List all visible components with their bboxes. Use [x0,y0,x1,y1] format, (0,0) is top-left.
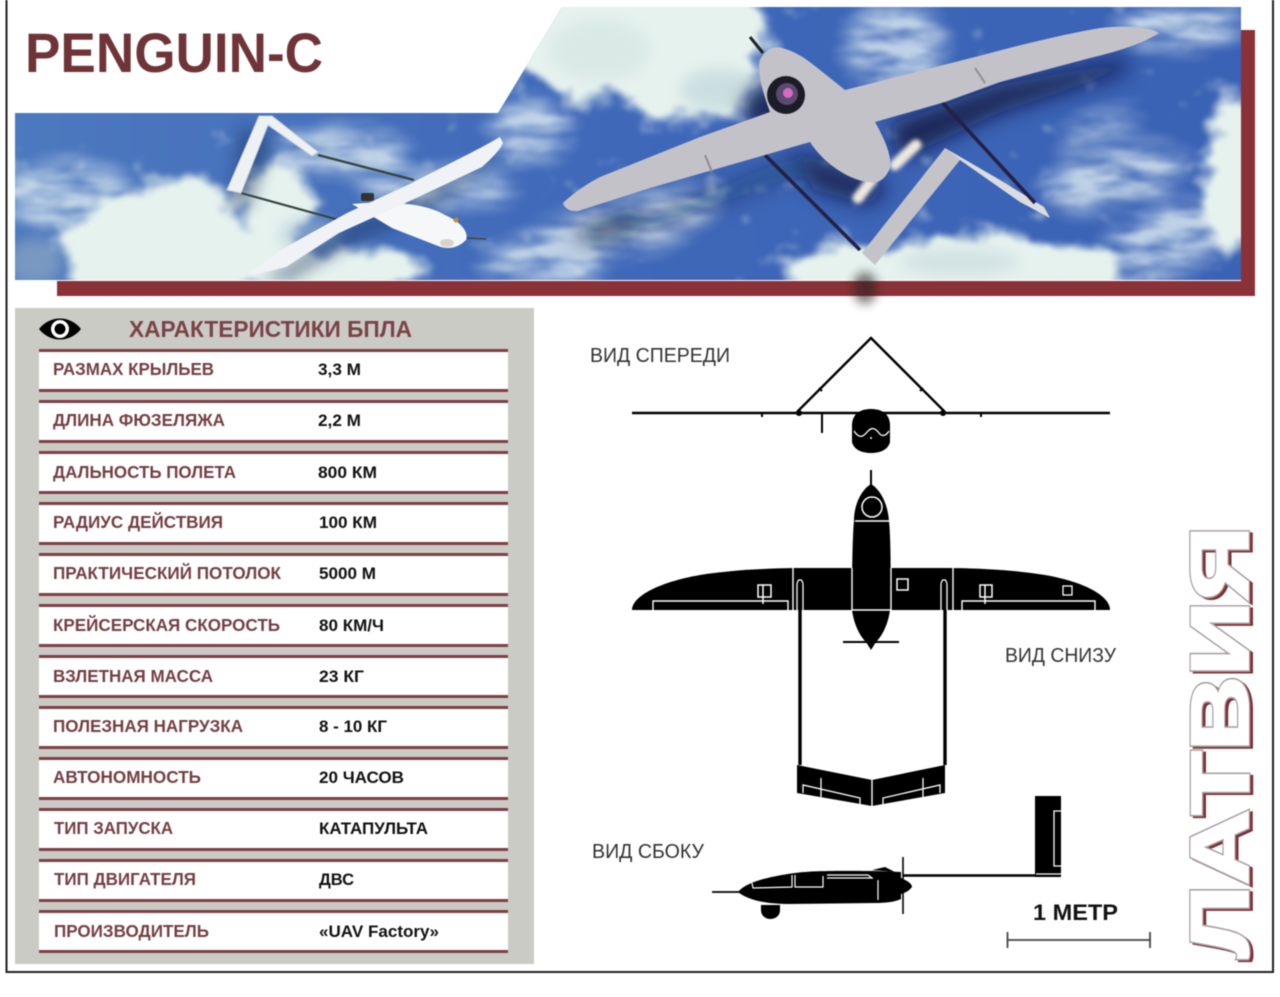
banner photo: sky with two drones [14,6,1242,281]
row: endurance: АВТОНОМНОСТЬ [53,767,201,787]
label: side view: ВИД СБОКУ [592,841,704,863]
row: engine type: ДВС [319,871,354,889]
row: operating radius [39,503,508,544]
row: payload [39,707,508,748]
label: underside view: ВИД СНИЗУ [1005,645,1116,667]
row: cruising speed: 80 КМ/Ч [319,617,384,635]
vertical country name: ЛАТВИЯ [1178,528,1269,960]
row: endurance: 20 ЧАСОВ [319,769,404,787]
diagram: underside view [632,470,1110,806]
row: take-off weight: 23 КГ [319,668,365,686]
big drone [563,27,1159,265]
row: service ceiling: 5000 М [319,565,376,583]
row: launch type [39,809,508,850]
row: take-off weight: ВЗЛЕТНАЯ МАССА [53,666,213,686]
row: fuselage length: ДЛИНА ФЮЗЕЛЯЖА [53,410,225,430]
row: operating radius: 100 КМ [319,514,377,532]
row: manufacturer [39,911,508,952]
row: wingspan [39,350,508,391]
clouds [14,6,1242,281]
row: service ceiling [39,554,508,595]
row: engine type [39,860,508,901]
sky background [15,7,1241,280]
small drone shadow [228,125,505,282]
row: take-off weight [39,656,508,697]
row: launch type: КАТАПУЛЬТА [319,820,428,838]
row: flight range [39,452,508,493]
row: manufacturer: ПРОИЗВОДИТЕЛЬ [54,921,209,941]
big drone shadow [572,58,1130,242]
table heading: ХАРАКТЕРИСТИКИ БПЛА [129,316,412,342]
label: front view: ВИД СПЕРЕДИ [590,345,730,367]
row: cruising speed: КРЕЙСЕРСКАЯ СКОРОСТЬ [53,614,280,635]
row: service ceiling: ПРАКТИЧЕСКИЙ ПОТОЛОК [53,562,281,583]
cloud shading [7,20,1020,286]
row: fuselage length [39,401,508,442]
row: flight range: ДАЛЬНОСТЬ ПОЛЕТА [53,462,236,482]
row: manufacturer: «UAV Factory» [319,923,439,941]
tail surfaces [862,148,960,265]
diagram: side view [712,796,1061,919]
wing and fuselage [563,27,1159,211]
row: payload: ПОЛЕЗНАЯ НАГРУЗКА [53,716,243,736]
scale bar: 1 МЕТР [1033,900,1118,925]
row: cruising speed [39,605,508,646]
scale bar [1007,900,1150,948]
title: PENGUIN-C [25,21,323,84]
row: payload: 8 - 10 КГ [319,718,388,736]
propeller blur [858,145,916,198]
row: endurance [39,758,508,799]
small drone [227,116,503,274]
vertical country name: ЛАТВИЯ [1175,526,1266,958]
row: flight range: 800 КМ [318,464,377,482]
row: wingspan: РАЗМАХ КРЫЛЬЕВ [53,359,214,379]
maroon banner backing [57,30,1255,296]
row: engine type: ТИП ДВИГАТЕЛЯ [54,869,196,889]
vertical country name: ЛАТВИЯ [1175,526,1266,958]
diagram: front view [632,338,1110,453]
row: launch type: ТИП ЗАПУСКА [54,818,173,838]
panel: specifications table [15,308,534,964]
row: operating radius: РАДИУС ДЕЙСТВИЯ [53,511,223,532]
shadow falling across maroon bar [853,272,877,304]
row: wingspan: 3,3 М [318,361,361,379]
row: fuselage length: 2,2 М [318,412,361,430]
tail booms [765,102,1035,250]
camera turret [767,76,805,114]
icon: eye [39,318,81,340]
